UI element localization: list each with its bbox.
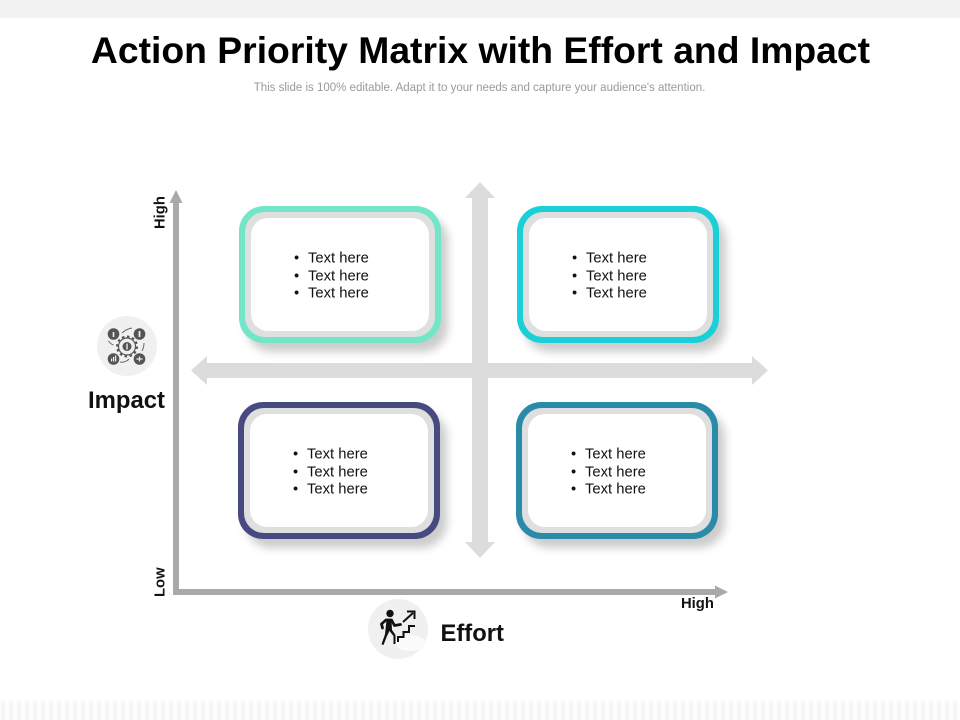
text block: top right bullets: • (572, 250, 577, 266)
text block: top right bullets: • (572, 268, 577, 284)
text block: bottom left bullets: Text here (307, 464, 368, 480)
text block: bottom right bullets: • (571, 464, 576, 480)
y axis arrow (170, 190, 182, 595)
x axis label: high: High (681, 596, 714, 612)
text block: bottom left bullets: • (293, 482, 298, 498)
text block: top right bullets: Text here (586, 250, 647, 266)
bottom striped band (0, 698, 960, 720)
y axis label: low: Low (152, 567, 168, 597)
panel: bottom right quadrant (516, 402, 725, 548)
impact label: Impact (88, 387, 165, 414)
text block: bottom right bullets: Text here (585, 464, 646, 480)
text block: top left bullets: Text here (308, 268, 369, 284)
text block: bottom right bullets: Text here (585, 446, 646, 462)
text block: top left bullets: Text here (308, 286, 369, 302)
text block: bottom left bullets: • (293, 464, 298, 480)
panel: top right quadrant (517, 206, 726, 352)
text block: bottom right bullets: Text here (585, 482, 646, 498)
text block: bottom left bullets: Text here (307, 446, 368, 462)
y axis label: high: High (152, 196, 168, 229)
text block: top right bullets: • (572, 286, 577, 302)
x axis arrow (173, 586, 728, 598)
effort label: Effort (440, 620, 504, 647)
text block: top left bullets: Text here (308, 250, 369, 266)
text block: top left bullets: • (294, 268, 299, 284)
title: Action Priority Matrix with Effort and Impact (91, 29, 870, 71)
horizontal grey quadrant arrow (191, 356, 768, 385)
text block: top right bullets: Text here (586, 286, 647, 302)
text block: bottom left bullets: Text here (307, 482, 368, 498)
text block: bottom left bullets: • (293, 446, 298, 462)
vertical grey quadrant arrow (465, 182, 495, 558)
text block: top left bullets: • (294, 286, 299, 302)
text block: top right bullets: Text here (586, 268, 647, 284)
panel: top left quadrant (239, 206, 448, 352)
top band (0, 0, 960, 18)
panel: bottom left quadrant (238, 402, 447, 548)
text block: bottom right bullets: • (571, 482, 576, 498)
text block: top left bullets: • (294, 250, 299, 266)
icon: impact gear with four satellites (97, 316, 157, 376)
subtitle: This slide is 100% editable. Adapt it to your needs and capture your audience's attention. (254, 82, 705, 94)
text block: bottom right bullets: • (571, 446, 576, 462)
icon: effort person climbing stairs (368, 599, 428, 659)
